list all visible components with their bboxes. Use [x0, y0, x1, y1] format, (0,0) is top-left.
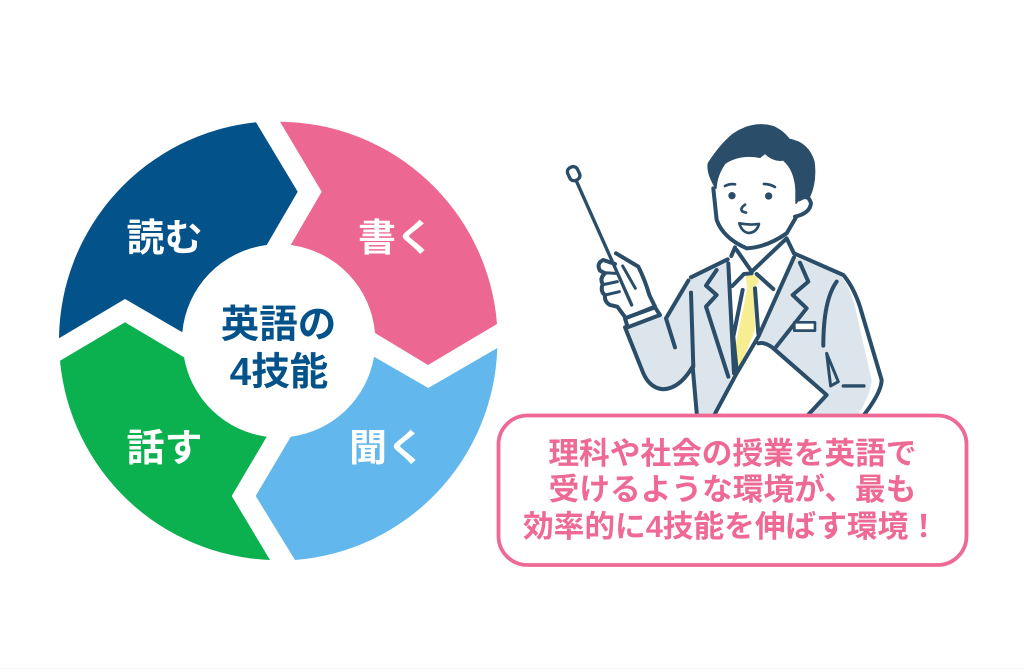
pocket square [794, 322, 815, 331]
segment: listen [256, 348, 497, 560]
segment: read [59, 122, 298, 338]
hair [708, 125, 815, 203]
callout text [523, 436, 939, 544]
four skills cycle diagram [59, 122, 497, 560]
center label [221, 304, 336, 394]
jacket fill [625, 259, 733, 420]
segment: speak: 話す [126, 428, 203, 470]
callout box [498, 416, 966, 565]
segment: read: 読む [126, 218, 203, 260]
callout text: 効率的に4技能を伸ばす環境！ [523, 509, 939, 544]
jacket outline [625, 253, 882, 420]
center label: 英語の [221, 304, 336, 346]
segment: write: 書く [358, 218, 434, 260]
shirt collar [731, 238, 794, 370]
face [713, 184, 811, 248]
pointer [566, 165, 632, 305]
tie [735, 275, 759, 372]
illustration: man with pointer [566, 125, 882, 420]
callout text: 受けるような環境が、最も [549, 472, 916, 507]
segment: listen: 聞く [349, 428, 425, 470]
hand [599, 253, 660, 327]
callout text: 理科や社会の授業を英語で [548, 436, 917, 471]
jacket right fill [758, 257, 872, 420]
segment: write [280, 122, 497, 365]
segment: speak [60, 322, 270, 560]
center label: 4技能 [230, 351, 328, 394]
